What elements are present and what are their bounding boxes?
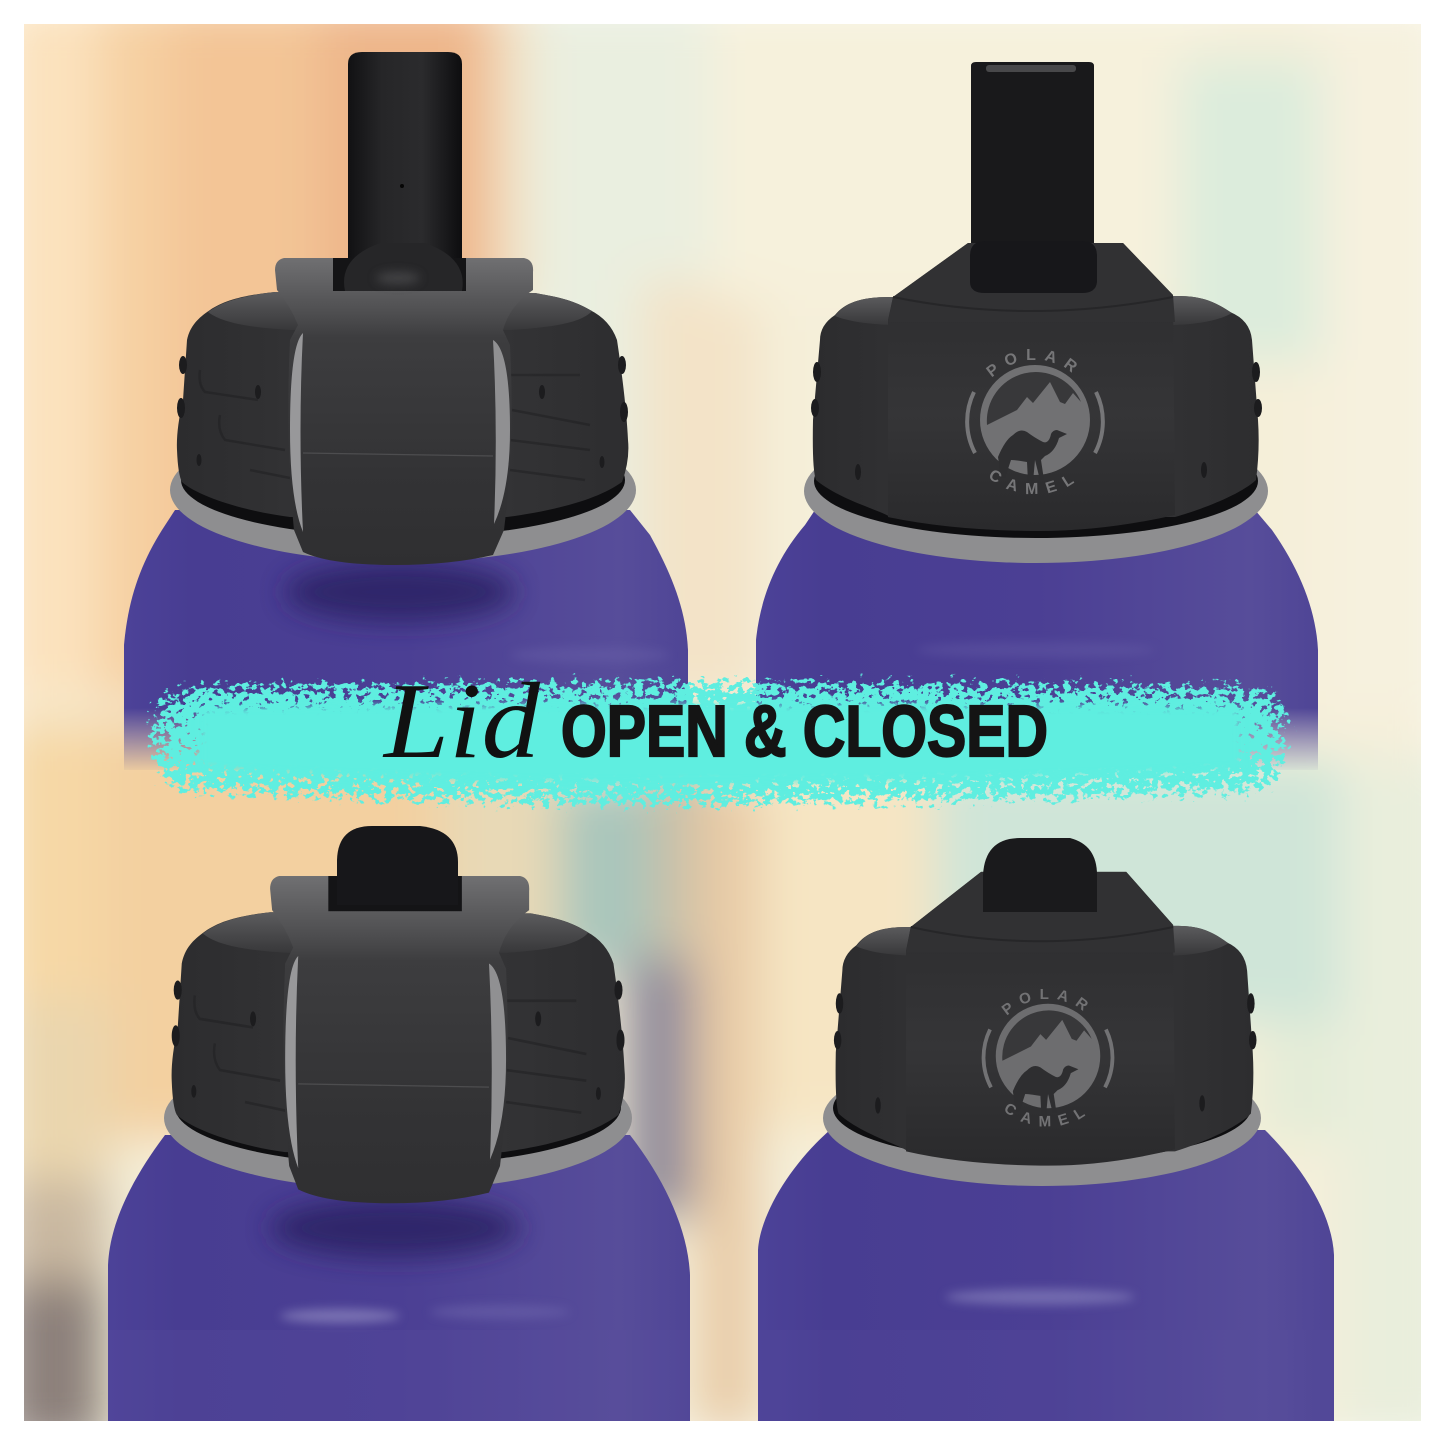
panel: bottom-left closed lid bottle [108, 826, 690, 1421]
title text: Lid [382, 662, 541, 781]
lid with flip handle [177, 258, 628, 565]
banner: title brush stroke [155, 662, 1285, 804]
logo: Polar Camel: CAMEL [1005, 1104, 1086, 1126]
lid with flip handle [172, 876, 625, 1203]
spout pivot [344, 243, 463, 291]
steel neck ring [170, 418, 636, 562]
lid closed face [834, 872, 1256, 1166]
title text: OPEN & CLOSED [561, 692, 1048, 772]
straw spout [348, 52, 462, 262]
bottle body [124, 510, 688, 770]
rectangular spout [971, 62, 1094, 260]
bottle body [758, 1130, 1334, 1421]
steel neck ring [823, 1094, 1261, 1186]
panel: bottom-right closed lid bottle [758, 838, 1334, 1421]
steel neck ring [804, 419, 1268, 563]
flip tab [337, 826, 458, 876]
lid closed face [811, 243, 1262, 531]
bottle body [756, 510, 1318, 770]
bottle body [108, 1135, 690, 1421]
brush stroke [155, 683, 1285, 804]
logo: Polar Camel: CAMEL [990, 470, 1074, 494]
logo: Polar Camel: POLAR [1001, 989, 1088, 1015]
steel neck ring [164, 1098, 632, 1184]
panel: top-right open lid bottle [756, 62, 1318, 770]
logo: Polar Camel [982, 989, 1114, 1126]
flip tab [983, 838, 1097, 912]
title text [382, 662, 1048, 781]
panel: top-left open lid bottle [124, 52, 688, 770]
logo: Polar Camel: POLAR [986, 349, 1077, 377]
logo: Polar Camel [965, 349, 1105, 494]
flip tab [970, 241, 1097, 293]
